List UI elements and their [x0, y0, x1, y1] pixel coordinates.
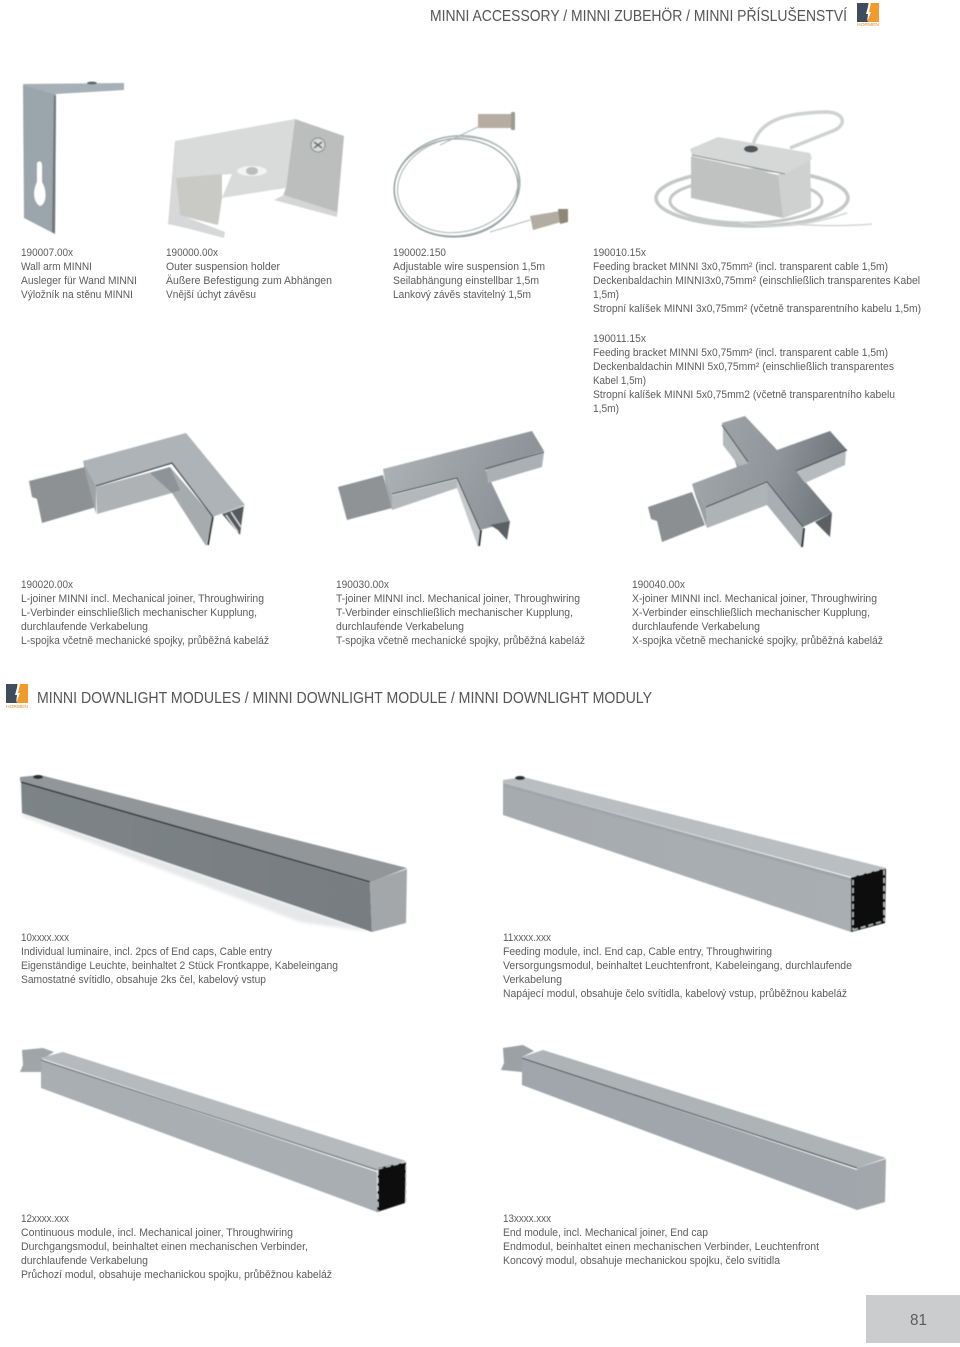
text: X-joiner: X-joiner MINNI incl. Mechanical joiner, Throughwiring [632, 593, 877, 605]
text: end module: End module, incl. Mechanical joiner, End cap [503, 1227, 708, 1239]
text: feeding bracket 3x0,75: Stropní kalíšek MINNI 3x0,75mm² (včetně transparentního kabelu 1,5m) [593, 303, 921, 315]
text: feeding module: Verkabelung [503, 974, 562, 986]
text: feeding module [503, 932, 852, 1000]
text: T-joiner: 190030.00x [336, 579, 389, 591]
text: end module [503, 1213, 819, 1267]
product image: adjustable wire suspension [388, 112, 568, 244]
icon: Hormen logo top: HORMEN [857, 22, 879, 27]
text: feeding bracket 3x0,75: Deckenbaldachin MINNI3x0,75mm² (einschließlich transparentes Kabel [593, 275, 920, 287]
page title: MINNI ACCESSORY / MINNI ZUBEHÖR / MINNI PŘÍSLUŠENSTVÍ [430, 7, 848, 25]
text: individual luminaire: Individual luminaire, incl. 2pcs of End caps, Cable entry [21, 946, 272, 958]
text: L-joiner [21, 579, 269, 647]
text: feeding bracket 5x0,75: Kabel 1,5m) [593, 375, 646, 387]
text: feeding module: Napájecí modul, obsahuje čelo svítidla, kabelový vstup, průběžnou kabeláž [503, 988, 847, 1000]
text: L-joiner: L-joiner MINNI incl. Mechanical joiner, Throughwiring [21, 593, 264, 605]
text: X-joiner [632, 579, 883, 647]
product image: L-joiner [29, 433, 245, 546]
text: T-joiner: T-Verbinder einschließlich mechanischer Kupplung, [336, 607, 573, 619]
section heading: downlight modules: MINNI DOWNLIGHT MODULES / MINNI DOWNLIGHT MODULE / MINNI DOWNLIGHT MODULY [37, 690, 652, 707]
text: wall arm: Výložník na stěnu MINNI [21, 289, 133, 301]
text: wall arm: 190007.00x [21, 247, 73, 259]
text: L-joiner: L-spojka včetně mechanické spojky, průběžná kabeláž [21, 635, 269, 647]
text: wire suspension: 190002.150 [393, 247, 446, 259]
text: wall arm [21, 247, 137, 301]
text: X-joiner: durchlaufende Verkabelung [632, 621, 760, 633]
text: individual luminaire: Eigenständige Leuchte, beinhaltet 2 Stück Frontkappe, Kabeleingang [21, 960, 338, 972]
product image: end module [501, 1045, 886, 1210]
text: outer suspension holder [166, 247, 332, 301]
text: feeding bracket 3x0,75: 1,5m) [593, 289, 619, 301]
text: feeding bracket 5x0,75 [593, 333, 895, 415]
text: outer suspension holder: Outer suspension holder [166, 261, 280, 273]
icon: Hormen logo section: HORMEN [6, 704, 28, 709]
text: X-joiner: 190040.00x [632, 579, 685, 591]
product image: outer suspension holder [168, 119, 344, 238]
text: individual luminaire: 10xxxx.xxx [21, 932, 69, 944]
text: feeding bracket 5x0,75: Stropní kalíšek MINNI 5x0,75mm2 (včetně transparentního kabelu [593, 389, 895, 401]
text: feeding module: Feeding module, incl. End cap, Cable entry, Throughwiring [503, 946, 772, 958]
text: wire suspension: Seilabhängung einstellbar 1,5m [393, 275, 539, 287]
text: X-joiner: X-Verbinder einschließlich mechanischer Kupplung, [632, 607, 870, 619]
page number box: 81 [910, 1312, 927, 1329]
text: wire suspension: Adjustable wire suspension 1,5m [393, 261, 545, 273]
text: individual luminaire: Samostatné svítidlo, obsahuje 2ks čel, kabelový vstup [21, 974, 266, 986]
text: end module: Endmodul, beinhaltet einen mechanischen Verbinder, Leuchtenfront [503, 1241, 819, 1253]
text: T-joiner: T-spojka včetně mechanické spojky, průběžná kabeláž [336, 635, 585, 647]
text: outer suspension holder: Äußere Befestigung zum Abhängen [166, 275, 332, 287]
text: outer suspension holder: 190000.00x [166, 247, 218, 259]
text: wall arm: Ausleger für Wand MINNI [21, 275, 137, 287]
icon: Hormen logo top [857, 3, 879, 27]
product image: feeding module [503, 776, 886, 932]
text: continuous module: durchlaufende Verkabelung [21, 1255, 148, 1267]
text: X-joiner: X-spojka včetně mechanické spojky, průběžná kabeláž [632, 635, 883, 647]
text: end module: Koncový modul, obsahuje mechanickou spojku, čelo svítidla [503, 1255, 781, 1267]
text: feeding bracket 5x0,75: Feeding bracket MINNI 5x0,75mm² (incl. transparent cable 1,5m) [593, 347, 888, 359]
text: continuous module: 12xxxx.xxx [21, 1213, 69, 1225]
text: feeding module: Versorgungsmodul, beinhaltet Leuchtenfront, Kabeleingang, durchlaufende [503, 960, 852, 972]
product image: individual luminaire [20, 775, 407, 932]
text: end module: 13xxxx.xxx [503, 1213, 551, 1225]
text: continuous module: Continuous module, incl. Mechanical joiner, Throughwiring [21, 1227, 293, 1239]
text: feeding bracket 5x0,75: 190011.15x [593, 333, 646, 345]
product image: T-joiner [338, 431, 544, 547]
text: feeding module: 11xxxx.xxx [503, 932, 551, 944]
text: wire suspension: Lankový závěs stavitelný 1,5m [393, 289, 531, 301]
product image: feeding bracket [656, 112, 872, 226]
text: individual luminaire [21, 932, 338, 986]
text: feeding bracket 3x0,75 [593, 247, 921, 315]
text: L-joiner: L-Verbinder einschließlich mechanischer Kupplung, [21, 607, 257, 619]
text: outer suspension holder: Vnější úchyt závěsu [166, 289, 256, 301]
text: T-joiner: durchlaufende Verkabelung [336, 621, 464, 633]
text: feeding bracket 5x0,75: 1,5m) [593, 403, 619, 415]
product image: continuous module [20, 1048, 406, 1212]
text: L-joiner: 190020.00x [21, 579, 73, 591]
text: feeding bracket 3x0,75: 190010.15x [593, 247, 646, 259]
text: feeding bracket 5x0,75: Deckenbaldachin MINNI 5x0,75mm² (einschließlich transparentes [593, 361, 894, 373]
text: continuous module: Durchgangsmodul, beinhaltet einen mechanischen Verbinder, [21, 1241, 308, 1253]
text: wire suspension [393, 247, 545, 301]
product image: X-joiner [648, 416, 847, 548]
text: continuous module [21, 1213, 332, 1281]
product image: wall arm [23, 82, 124, 234]
text: T-joiner: T-joiner MINNI incl. Mechanical joiner, Throughwiring [336, 593, 580, 605]
text: feeding bracket 3x0,75: Feeding bracket MINNI 3x0,75mm² (incl. transparent cable 1,5m) [593, 261, 888, 273]
text: wall arm: Wall arm MINNI [21, 261, 92, 273]
page number box [866, 1295, 960, 1343]
text: T-joiner [336, 579, 585, 647]
icon: Hormen logo section [6, 684, 28, 709]
text: continuous module: Průchozí modul, obsahuje mechanickou spojku, průběžnou kabeláž [21, 1269, 332, 1281]
text: L-joiner: durchlaufende Verkabelung [21, 621, 148, 633]
